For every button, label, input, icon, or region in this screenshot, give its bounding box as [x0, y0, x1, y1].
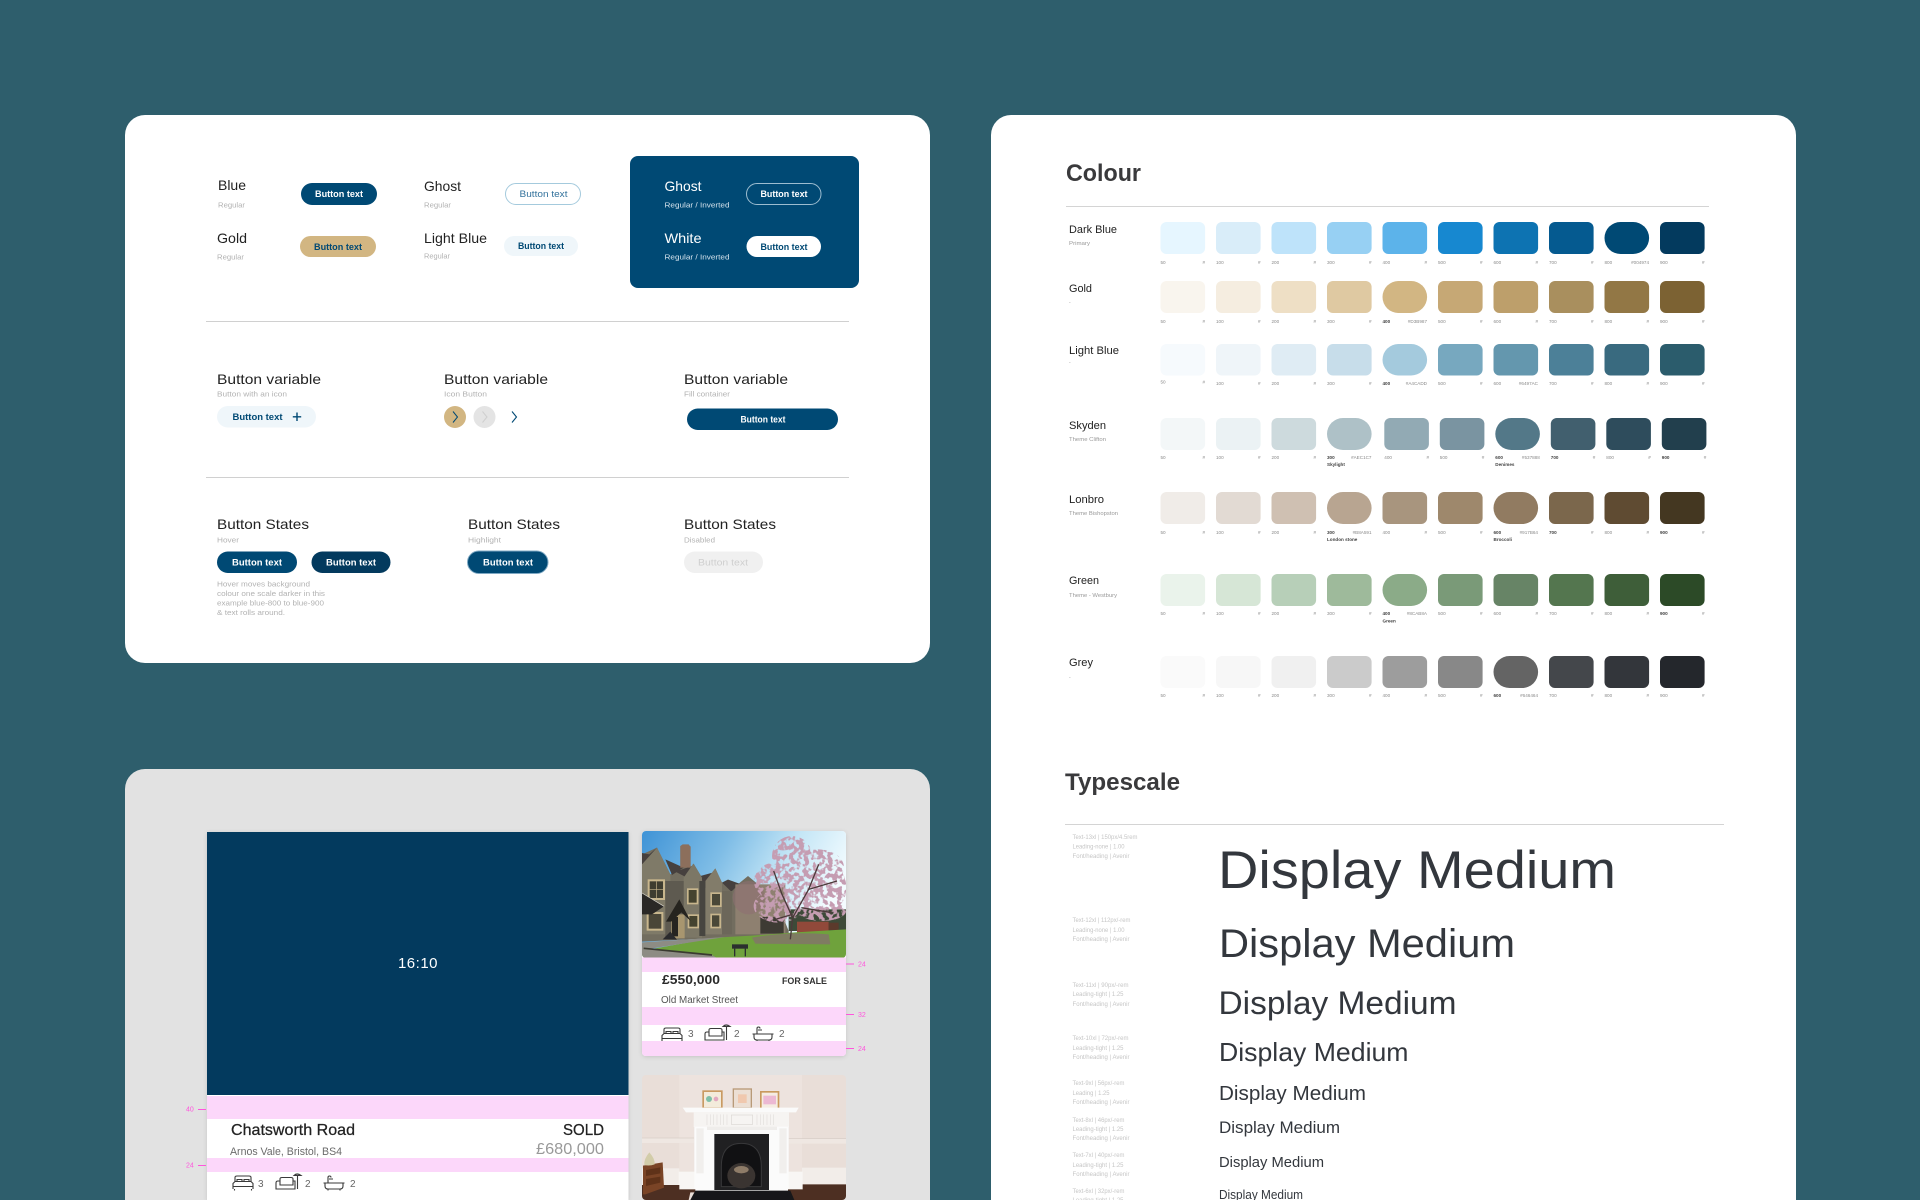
type row: text-6xl: [1072, 1188, 1303, 1200]
button states: disabled: Button States: [684, 516, 776, 532]
palette: gold: #: [1646, 319, 1649, 324]
palette: dark blue: 400: [1382, 260, 1391, 265]
palette: lonbro: 800: [1604, 530, 1613, 535]
type row: text-11xl: [1072, 983, 1456, 1021]
button states: highlight: Button text: [483, 558, 533, 568]
palette: lonbro: 200: [1272, 530, 1280, 535]
heading: typescale: Typescale: [1065, 769, 1180, 796]
type row: text-7xl: Display Medium: [1219, 1154, 1324, 1171]
button states: disabled: Disabled: [684, 536, 715, 544]
palette: grey: #: [1424, 693, 1427, 698]
palette: light blue: #6497AC: [1519, 381, 1539, 386]
palette: skyden: #: [1482, 455, 1485, 460]
palette: gold: #: [1591, 319, 1594, 324]
palette: green: #: [1646, 611, 1649, 616]
palette: green: 900: [1660, 611, 1668, 616]
palette: grey: #: [1313, 693, 1316, 698]
palette: gold: #: [1258, 319, 1261, 324]
button states: hover: Hover moves background: [217, 580, 310, 588]
type row: text-9xl: Leading | 1.25: [1072, 1091, 1110, 1097]
palette: light blue: Light Blue: [1069, 345, 1119, 357]
button row: ghost: Regular: [424, 200, 452, 210]
palette: skyden: 700: [1551, 455, 1559, 460]
palette: lonbro: #B8A591: [1353, 530, 1372, 535]
inverted buttons panel: Ghost: [664, 178, 702, 194]
button row: gold: Regular: [217, 252, 245, 262]
palette: skyden: 100: [1216, 455, 1224, 460]
palette: gold: #: [1480, 319, 1483, 324]
palette: green: Green: [1382, 618, 1396, 624]
palette: light blue: #: [1202, 380, 1205, 384]
button variable: with icon: Button with an icon: [217, 390, 287, 398]
button states: hover: example blue-800 to blue-900: [217, 598, 324, 608]
type row: text-10xl: Leading-tight | 1.25: [1072, 1046, 1124, 1052]
palette: green: [1069, 574, 1705, 624]
palette: light blue: 50: [1160, 380, 1166, 384]
palette: dark blue: #: [1369, 260, 1372, 265]
type row: text-11xl: Text-11xl | 90px/-rem: [1072, 983, 1128, 989]
palette: light blue: 200: [1272, 381, 1280, 386]
palette: light blue: #: [1258, 381, 1261, 386]
palette: green: 400: [1382, 611, 1391, 616]
palette: green: #: [1591, 611, 1594, 616]
palette: gold: 200: [1272, 319, 1280, 324]
button variable: icon buttons: Icon Button: [444, 390, 487, 398]
palette: dark blue: #: [1313, 260, 1316, 265]
button row: blue: Blue: [218, 177, 246, 193]
palette: green: 300: [1327, 611, 1335, 616]
button states: hover: & text rolls around.: [217, 608, 285, 617]
button variable: fill container: Button text: [740, 414, 786, 424]
inverted buttons panel: Button text: [760, 189, 808, 199]
palette: light blue: #: [1646, 381, 1649, 386]
button states: hover: Button text: [232, 558, 282, 568]
palette: dark blue: 700: [1549, 260, 1557, 265]
type row: text-7xl: [1072, 1153, 1324, 1178]
button row: gold: Gold: [217, 230, 247, 246]
palette: grey: 400: [1382, 693, 1391, 698]
palette: dark blue: #: [1591, 260, 1594, 265]
palette: lonbro: #: [1424, 530, 1427, 535]
type row: text-13xl: Leading-none | 1.00: [1072, 844, 1125, 850]
palette: green: #8CAB8A: [1407, 611, 1428, 616]
palette: skyden: Theme Clifton: [1069, 437, 1106, 443]
palette: grey: 100: [1216, 693, 1224, 698]
palette: green: #: [1535, 611, 1538, 616]
palette: dark blue: 100: [1216, 260, 1224, 265]
palette: grey: -: [1069, 675, 1071, 681]
palette: grey: #: [1258, 693, 1261, 698]
feature icons: 2: [779, 1029, 785, 1040]
button variable: fill container: [684, 371, 838, 430]
spacing markers: large card: 24: [186, 1162, 194, 1170]
property title and price: SOLD: [563, 1122, 604, 1139]
palette: green: 200: [1272, 611, 1280, 616]
spacing markers: small card: 24: [858, 962, 866, 968]
type row: text-10xl: Text-10xl | 72px/-rem: [1072, 1036, 1128, 1042]
inverted buttons panel: Regular / Inverted: [664, 200, 730, 210]
palette: dark blue: 800: [1604, 260, 1613, 265]
palette: light blue: 700: [1549, 381, 1557, 386]
type row: text-8xl: Text-8xl | 46px/-rem: [1072, 1118, 1124, 1124]
palette: dark blue: #: [1535, 260, 1538, 265]
type row: text-8xl: Font/heading | Avenir: [1072, 1136, 1130, 1142]
photo: manor house: [642, 831, 846, 958]
palette: grey: #: [1702, 693, 1705, 698]
palette: light blue: 900: [1660, 381, 1668, 386]
button row: blue: [218, 177, 377, 210]
price and status: £550,000: [662, 972, 720, 987]
panel: colour and typescale: [991, 115, 1796, 1200]
palette: lonbro: 900: [1660, 530, 1668, 535]
palette: dark blue: 200: [1272, 260, 1280, 265]
type row: text-12xl: Display Medium: [1219, 922, 1515, 966]
palette: green: #: [1202, 611, 1205, 616]
button variable: fill container: Button variable: [684, 371, 788, 387]
panel: buttons: [125, 115, 930, 663]
button states: highlight: [468, 516, 560, 574]
palette: skyden: #: [1648, 455, 1651, 460]
palette: light blue: #: [1480, 381, 1483, 386]
button variable: icon buttons: Button variable: [444, 371, 548, 387]
button states: disabled: [684, 516, 776, 573]
type row: text-13xl: [1072, 835, 1616, 900]
type row: text-7xl: Font/heading | Avenir: [1072, 1172, 1130, 1178]
palette: grey: 200: [1272, 693, 1280, 698]
palette: lonbro: #: [1702, 530, 1705, 535]
property title and price: Chatsworth Road: [231, 1122, 355, 1139]
palette: lonbro: Theme Bishopston: [1069, 511, 1118, 517]
type row: text-9xl: Font/heading | Avenir: [1072, 1100, 1130, 1106]
palette: green: #: [1480, 611, 1483, 616]
palette: skyden: 900: [1662, 455, 1670, 460]
button states: hover: Button States: [217, 516, 309, 532]
property title and price: Arnos Vale, Bristol, BS4: [230, 1146, 342, 1158]
palette: light blue: #: [1369, 381, 1372, 386]
type row: text-12xl: [1072, 918, 1515, 966]
button states: highlight: Highlight: [468, 536, 502, 544]
spacing markers: large card: [186, 1106, 206, 1170]
property features icons: 2: [350, 1179, 356, 1190]
panel: property cards: [125, 769, 930, 1200]
palette: lonbro: #: [1202, 530, 1205, 535]
palette: light blue: #: [1313, 381, 1316, 386]
palette: gold: 700: [1549, 319, 1557, 324]
palette: lonbro: 700: [1549, 530, 1557, 535]
image placeholder 16:10: [207, 832, 628, 1095]
button states: hover: Hover: [217, 536, 240, 544]
button row: ghost: Button text: [520, 189, 568, 199]
palette: gold: 300: [1327, 319, 1335, 324]
palette: gold: #: [1702, 319, 1705, 324]
large property card: [207, 832, 628, 1200]
inverted buttons panel: White: [664, 230, 702, 246]
palette: lonbro: 500: [1438, 530, 1446, 535]
palette: light blue: #A4CADD: [1406, 381, 1428, 386]
palette: lonbro: #: [1591, 530, 1594, 535]
palette: grey: 700: [1549, 693, 1557, 698]
palette: lonbro: Lonbro: [1069, 494, 1104, 506]
palette: gold: #D3B987: [1408, 319, 1427, 324]
button states: highlight: Button States: [468, 516, 560, 532]
property title and price: [230, 1122, 604, 1158]
palette: skyden: #: [1202, 455, 1205, 460]
palette: dark blue: 900: [1660, 260, 1668, 265]
button variable: icon buttons: [444, 371, 548, 428]
palette: grey: #: [1646, 693, 1649, 698]
type row: text-9xl: Text-9xl | 56px/-rem: [1072, 1081, 1124, 1087]
palette: gold: 50: [1160, 319, 1166, 324]
palette: gold: [1069, 281, 1705, 324]
button row: light blue: Button text: [518, 241, 564, 251]
palette: green: 600: [1494, 611, 1502, 616]
palette: gold: 800: [1604, 319, 1613, 324]
button row: light blue: Regular: [424, 252, 450, 260]
property features icons: 3: [258, 1179, 264, 1190]
palette: gold: Gold: [1069, 283, 1092, 295]
type row: text-8xl: [1072, 1118, 1340, 1142]
palette: gold: -: [1069, 300, 1071, 306]
spacing markers: small card: [846, 962, 866, 1053]
palette: dark blue: #: [1480, 260, 1483, 265]
palette: grey: 900: [1660, 693, 1668, 698]
palette: dark blue: Dark Blue: [1069, 224, 1117, 236]
type row: text-12xl: Text-12xl | 112px/-rem: [1072, 918, 1130, 924]
palette: skyden: 50: [1160, 455, 1166, 460]
palette: green: #: [1369, 611, 1372, 616]
button variable: with icon: Button variable: [217, 371, 321, 387]
palette: dark blue: #: [1258, 260, 1261, 265]
type row: text-10xl: Display Medium: [1219, 1037, 1408, 1067]
type row: text-12xl: Font/heading | Avenir: [1072, 937, 1130, 943]
spacing markers: small card: 24: [858, 1046, 866, 1053]
palette: dark blue: 500: [1438, 260, 1446, 265]
palette: gold: 500: [1438, 319, 1446, 324]
palette: green: #: [1313, 611, 1316, 616]
small property card: for sale: [642, 831, 846, 1056]
type row: text-9xl: Display Medium: [1219, 1082, 1366, 1105]
type row: text-8xl: Leading-tight | 1.25: [1072, 1127, 1124, 1133]
button row: light blue: [424, 230, 578, 260]
palette: skyden: #: [1704, 455, 1707, 460]
type row: text-10xl: [1072, 1036, 1408, 1067]
palette: grey: #: [1202, 693, 1205, 698]
type row: text-9xl: [1072, 1081, 1366, 1106]
palette: grey: #646464: [1520, 693, 1538, 698]
palette: gold: 400: [1382, 319, 1391, 324]
type row: text-6xl: Text-6xl | 32px/-rem: [1072, 1189, 1124, 1195]
palette: lonbro: #: [1313, 530, 1316, 535]
photo: fireplace card: [642, 1075, 846, 1200]
palette: grey: 300: [1327, 693, 1335, 698]
feature icons: [662, 1025, 785, 1042]
button states: hover: [217, 516, 390, 617]
palette: skyden: 500: [1440, 455, 1448, 460]
palette: skyden: 600: [1495, 455, 1503, 460]
button variable: with icon: [217, 371, 321, 428]
button row: blue: Regular: [218, 200, 246, 210]
inverted buttons panel: Regular / Inverted: [664, 252, 730, 262]
palette: gold: #: [1313, 319, 1316, 324]
button row: gold: [217, 230, 376, 262]
spacing markers: small card: 32: [858, 1012, 866, 1019]
palette: skyden: [1069, 418, 1707, 467]
palette: light blue: 800: [1604, 381, 1613, 386]
type row: text-13xl: Font/heading | Avenir: [1072, 854, 1130, 860]
button row: gold: Button text: [314, 242, 362, 252]
palette: lonbro: [1069, 492, 1705, 542]
price and status: [661, 972, 827, 1006]
palette: lonbro: 100: [1216, 530, 1224, 535]
palette: grey: #: [1369, 693, 1372, 698]
palette: green: 700: [1549, 611, 1557, 616]
palette: skyden: 300: [1327, 455, 1335, 460]
palette: skyden: Skylight: [1327, 462, 1345, 467]
palette: dark blue: #: [1424, 260, 1427, 265]
palette: gold: 900: [1660, 319, 1668, 324]
type row: text-7xl: Leading-tight | 1.25: [1072, 1163, 1124, 1169]
palette: dark blue: #: [1702, 260, 1705, 265]
palette: lonbro: 600: [1494, 530, 1502, 535]
palette: lonbro: 400: [1382, 530, 1391, 535]
palette: green: #: [1258, 611, 1261, 616]
button row: light blue: Light Blue: [424, 230, 487, 246]
image placeholder 16:10: 16:10: [398, 955, 438, 972]
palette: lonbro: London stone: [1327, 537, 1358, 542]
inverted buttons panel: [630, 156, 859, 288]
button states: hover: Button text: [326, 558, 376, 568]
palette: gold: 600: [1494, 319, 1502, 324]
palette: grey: [1069, 656, 1705, 698]
button variable: with icon: Button text: [232, 412, 282, 422]
type row: text-8xl: Display Medium: [1219, 1118, 1340, 1137]
type row: text-11xl: Font/heading | Avenir: [1072, 1002, 1130, 1008]
palette: grey: 800: [1604, 693, 1613, 698]
palette: grey: #: [1480, 693, 1483, 698]
feature icons: 3: [688, 1029, 694, 1040]
palette: dark blue: Primary: [1069, 241, 1091, 247]
heading: colour: Colour: [1066, 160, 1141, 187]
palette: light blue: 500: [1438, 381, 1446, 386]
button states: hover: colour one scale darker in this: [217, 589, 325, 598]
palette: skyden: #537888: [1522, 455, 1540, 460]
palette: light blue: #: [1702, 381, 1705, 386]
button variable: fill container: Fill container: [684, 390, 731, 398]
button row: ghost: Ghost: [424, 178, 461, 194]
palette: light blue: -: [1069, 360, 1071, 366]
palette: green: Green: [1069, 575, 1099, 587]
price and status: Old Market Street: [661, 995, 738, 1006]
palette: light blue: 100: [1216, 381, 1224, 386]
palette: skyden: 800: [1606, 455, 1614, 460]
feature icons: 2: [734, 1029, 740, 1040]
palette: lonbro: #: [1258, 530, 1261, 535]
palette: skyden: #: [1313, 455, 1316, 460]
type row: text-12xl: Leading-none | 1.00: [1072, 928, 1125, 934]
type row: text-13xl: Display Medium: [1218, 841, 1616, 900]
palette: green: 50: [1160, 611, 1166, 616]
palette: light blue: 600: [1494, 381, 1502, 386]
palette: dark blue: #004974: [1631, 260, 1649, 265]
palette: grey: 50: [1160, 693, 1166, 698]
palette: dark blue: 300: [1327, 260, 1335, 265]
palette: skyden: 200: [1272, 455, 1280, 460]
spacing markers: large card: 40: [186, 1106, 194, 1114]
inverted buttons panel: Button text: [760, 242, 808, 252]
palette: green: #: [1702, 611, 1705, 616]
palette: skyden: #: [1426, 455, 1429, 460]
palette: skyden: Denimes: [1495, 462, 1515, 467]
palette: gold: #: [1535, 319, 1538, 324]
palette: green: 500: [1438, 611, 1446, 616]
palette: dark blue: #: [1202, 260, 1205, 265]
palette: skyden: #: [1593, 455, 1596, 460]
palette: dark blue: 600: [1494, 260, 1502, 265]
button row: blue: Button text: [315, 189, 363, 199]
palette: lonbro: 300: [1327, 530, 1335, 535]
button states: disabled: Button text: [698, 558, 749, 568]
palette: skyden: #AEC1C7: [1351, 455, 1372, 460]
palette: green: 100: [1216, 611, 1224, 616]
palette: green: Theme - Westbury: [1069, 593, 1118, 599]
palette: skyden: #: [1258, 455, 1261, 460]
palette: grey: #: [1591, 693, 1594, 698]
palette: dark blue: 50: [1160, 260, 1166, 265]
type row: text-7xl: Text-7xl | 40px/-rem: [1072, 1153, 1124, 1159]
property features icons: [233, 1174, 356, 1190]
palette: grey: Grey: [1069, 657, 1093, 669]
palette: lonbro: Broccoli: [1494, 537, 1512, 542]
type row: text-10xl: Font/heading | Avenir: [1072, 1055, 1130, 1061]
palette: gold: 100: [1216, 319, 1224, 324]
palette: light blue: [1069, 344, 1705, 386]
palette: lonbro: #: [1646, 530, 1649, 535]
palette: dark blue: [1069, 222, 1705, 265]
type row: text-11xl: Display Medium: [1218, 985, 1456, 1021]
palette: light blue: 300: [1327, 381, 1335, 386]
palette: lonbro: 50: [1160, 530, 1166, 535]
button row: ghost: [424, 178, 580, 210]
type row: text-13xl: Text-13xl | 150px/4.5rem: [1072, 835, 1138, 841]
palette: grey: 500: [1438, 693, 1446, 698]
palette: gold: #: [1369, 319, 1372, 324]
property title and price: £680,000: [536, 1141, 604, 1158]
palette: light blue: 400: [1382, 381, 1391, 386]
palette: lonbro: #: [1480, 530, 1483, 535]
price and status: FOR SALE: [782, 976, 827, 987]
palette: lonbro: #917B64: [1520, 530, 1538, 535]
palette: light blue: #: [1591, 381, 1594, 386]
palette: gold: #: [1202, 319, 1205, 324]
palette: skyden: 400: [1384, 455, 1392, 460]
property features icons: 2: [305, 1179, 311, 1190]
palette: grey: 600: [1494, 693, 1502, 698]
palette: green: 800: [1604, 611, 1613, 616]
type row: text-11xl: Leading-tight | 1.25: [1072, 992, 1124, 998]
palette: skyden: Skyden: [1069, 420, 1106, 432]
